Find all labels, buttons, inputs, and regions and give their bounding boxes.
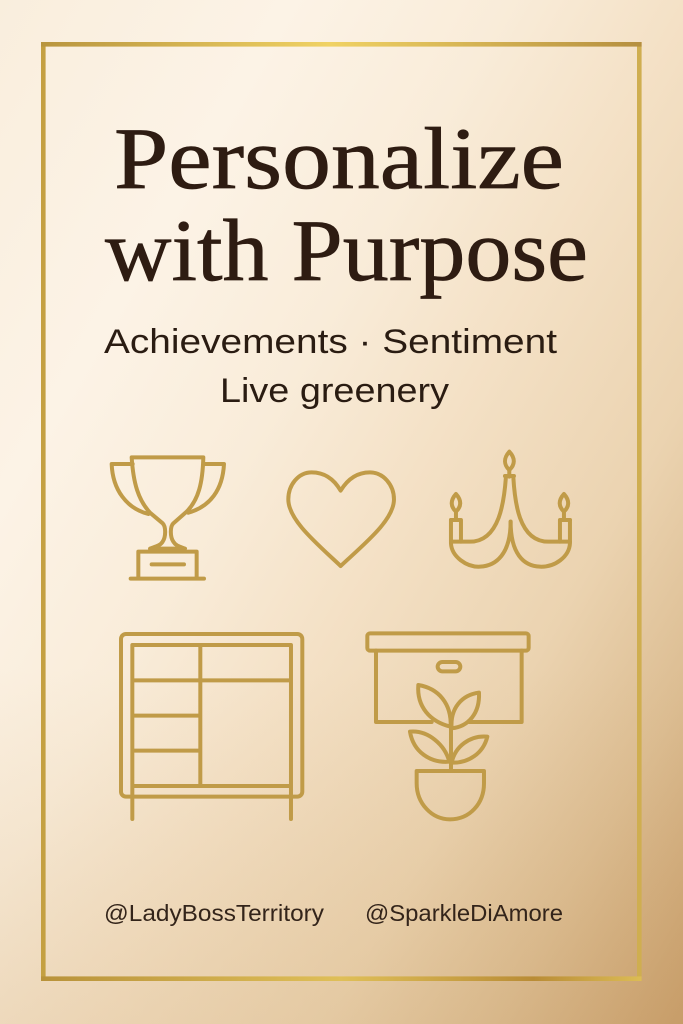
icon: chandelier (451, 452, 570, 567)
icon: trophy (112, 457, 224, 579)
icon: heart (288, 472, 394, 566)
footer handles: @LadyBossTerritory (104, 900, 324, 926)
title: Personalize (114, 111, 564, 208)
subtitle: Live greenery (220, 372, 449, 410)
footer handles (104, 900, 563, 926)
footer handles: @SparkleDiAmore (365, 900, 563, 926)
subtitle (104, 323, 558, 410)
icon: storage box with potted plant (367, 633, 529, 819)
subtitle: Achievements · Sentiment (104, 323, 558, 361)
icon: dresser (121, 634, 302, 819)
title: with Purpose (105, 203, 588, 300)
title (105, 111, 588, 300)
